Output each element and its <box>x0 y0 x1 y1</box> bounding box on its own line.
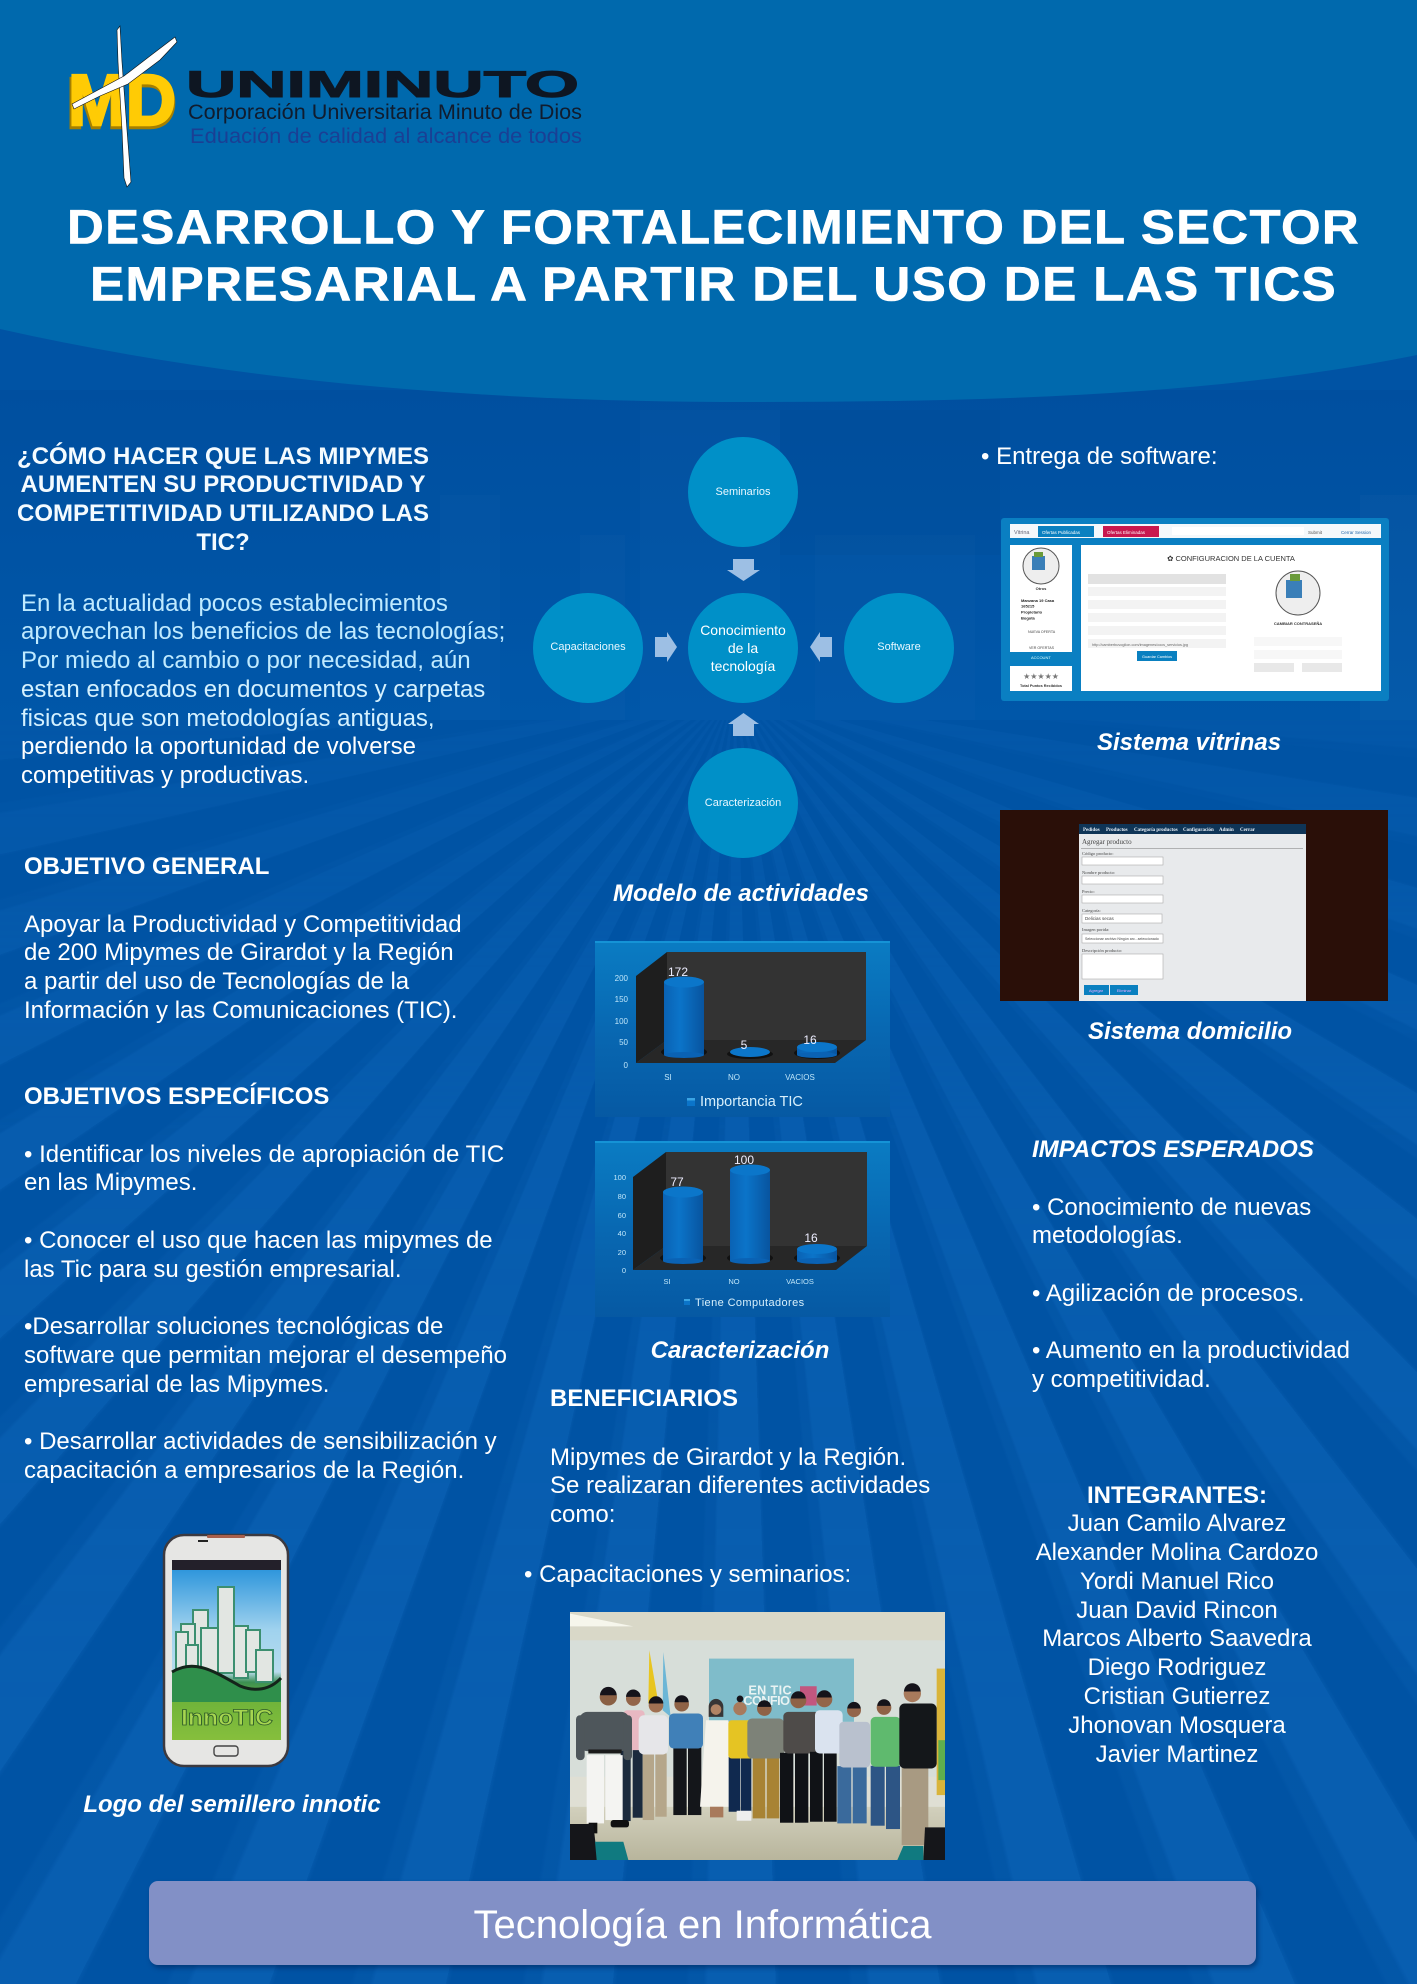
main panel: ✿ CONFIGURACION DE LA CUENTA <box>1167 554 1295 563</box>
screenshot: sistema domicilio: Código producto: <box>1082 851 1114 856</box>
screenshot: sistema domicilio: Categoría productos <box>1134 828 1178 833</box>
node: Software: Software <box>877 641 921 653</box>
node: Conocimiento de la tecnologia: tecnología <box>711 658 776 674</box>
main panel: Guardar Cambios <box>1142 655 1172 659</box>
axis labels: VACIOS <box>785 1073 815 1082</box>
screenshot: sistema domicilio: Agregar <box>1089 988 1104 993</box>
screenshot: sistema domicilio: Pedidos <box>1083 828 1100 833</box>
heading: objetivos especificos: OBJETIVOS ESPECÍFICOS <box>24 1082 329 1110</box>
main panel: CAMBIAR CONTRASEÑA <box>1274 621 1322 626</box>
text: objetivos especificos list: • Identificar los niveles de apropiación de TIC en las Mipymes. • Conocer el uso que hacen las mipymes de las Tic para su gestión empresarial. •Desarrollar soluciones tecnológicas de software que permitan mejorar el desempeño empresarial de las Mipymes. • Desarrollar actividades de sensibilización y capacitación a empresarios de la Región. <box>24 1140 507 1484</box>
screenshot: sistema domicilio: Productos <box>1106 828 1128 833</box>
nav bar: Vitrina <box>1014 530 1030 536</box>
image: group photo: EN TIC <box>748 1684 792 1698</box>
cylinder: SI 77 <box>660 1175 706 1264</box>
nav bar: Cerrar Session <box>1341 530 1372 535</box>
sidebar: ACCOUNT <box>1031 655 1051 660</box>
caption: modelo de actividades: Modelo de actividades <box>613 880 869 906</box>
axis labels: 0 <box>624 1061 629 1070</box>
axis labels <box>613 1173 814 1286</box>
caption: caracterizacion: Caracterización <box>651 1336 829 1364</box>
heading: objetivo general: OBJETIVO GENERAL <box>24 852 269 880</box>
logo: UNIMINUTO <box>66 25 582 188</box>
sidebar: NUEVA OFERTA <box>1028 630 1056 634</box>
sidebar: ★★★★★ <box>1023 672 1059 681</box>
people <box>576 1683 937 1845</box>
sidebar: Total Puntos Recibidos <box>1020 684 1062 688</box>
sidebar: Manzana 19 Casa <box>1021 598 1055 603</box>
image: phone with innotic logo <box>162 1534 290 1768</box>
footer bar: tecnologia en informatica <box>149 1881 1256 1965</box>
diagram: modelo de actividades <box>533 437 954 858</box>
node: Caracterizacion <box>688 748 798 858</box>
main panel: http://camberbuvoglion.com/imagenes/cocs_servicios.jpg <box>1092 643 1188 647</box>
screenshot: sistema domicilio: Nombre producto: <box>1082 870 1115 875</box>
cylinder: VACIOS 16: 16 <box>804 1231 818 1245</box>
arrow: left <box>810 632 832 662</box>
node: Conocimiento de la tecnologia: Conocimiento <box>700 622 786 638</box>
cylinder: SI 77: 77 <box>670 1175 684 1189</box>
axis labels: 0 <box>622 1266 626 1275</box>
screenshot: sistema domicilio: Cerrar <box>1240 828 1256 833</box>
sidebar: 165215 <box>1021 604 1035 608</box>
heading: research question: ¿CÓMO HACER QUE LAS MIPYMES AUMENTEN SU PRODUCTIVIDAD Y COMPETITIVIDAD UTILIZANDO LAS TIC? <box>17 442 429 556</box>
screenshot: sistema domicilio: Agregar producto <box>1082 838 1132 846</box>
axis labels <box>615 974 815 1082</box>
screenshot: sistema domicilio: Precio: <box>1082 889 1095 894</box>
cylinder: SI 172: 172 <box>668 965 688 979</box>
screenshot: sistema domicilio: Eliminar <box>1117 988 1132 993</box>
screenshot: sistema domicilio: Categoría: <box>1082 908 1101 913</box>
sidebar: VER OFERTAS <box>1029 646 1055 650</box>
screenshot: sistema domicilio: Imagen portda: <box>1082 927 1109 932</box>
axis labels: 20 <box>618 1248 626 1257</box>
axis labels: 40 <box>618 1229 626 1238</box>
image: group photo <box>570 1612 945 1860</box>
screenshot: sistema domicilio <box>1000 810 1388 1001</box>
background: skyline and top wave <box>0 0 1417 422</box>
chart: tiene computadores <box>595 1141 890 1317</box>
axis labels: 100 <box>615 1017 629 1026</box>
axis labels: 80 <box>618 1192 626 1201</box>
arrow: right <box>655 632 677 662</box>
axis labels: 150 <box>615 995 629 1004</box>
cylinder: SI 172 <box>661 965 707 1058</box>
legend: Importancia TIC <box>700 1094 803 1110</box>
axis labels: 60 <box>618 1211 626 1220</box>
node: Capacitaciones <box>533 593 643 703</box>
axis labels: 50 <box>619 1038 629 1047</box>
text: introduction: En la actualidad pocos establecimientos aprovechan los beneficios de las tecnologías; Por miedo al cambio o por necesidad, aún estan enfocados en documentos y carpetas fisicas que son metodologías antiguas, perdiendo la oportunidad de volverse competitivas y productivas. <box>21 590 505 789</box>
axis labels: 200 <box>615 974 629 983</box>
sidebar: Bogota <box>1021 616 1036 620</box>
nav bar: Submit <box>1308 530 1323 535</box>
node: Seminarios: Seminarios <box>715 486 771 498</box>
footer bar: tecnologia en informatica: Tecnología en Informática <box>473 1903 932 1947</box>
arrow: down <box>727 559 760 581</box>
screenshot: sistema domicilio: Delicias secas <box>1085 916 1115 921</box>
nav bar: Ofertas Eliminadas <box>1107 530 1146 535</box>
screenshot: sistema domicilio: Seleccionar archivo Ningún arc...seleccionado <box>1085 937 1159 941</box>
cylinder: VACIOS 16 <box>794 1033 840 1059</box>
node: Seminarios <box>688 437 798 547</box>
screenshot: sistema domicilio: Configuración <box>1183 828 1214 833</box>
title <box>67 202 1360 312</box>
node: Capacitaciones: Capacitaciones <box>550 641 626 653</box>
caption: sistema vitrinas: Sistema vitrinas <box>1097 728 1281 756</box>
cylinder: NO 100 <box>727 1153 773 1264</box>
title: DESARROLLO Y FORTALECIMIENTO DEL SECTOR <box>67 202 1360 254</box>
image: group photo: CONFIO <box>743 1694 790 1708</box>
city <box>176 1587 273 1682</box>
heading: beneficiarios: BENEFICIARIOS <box>550 1384 738 1412</box>
sidebar: Propietario <box>1021 610 1043 614</box>
legend: Tiene Computadores <box>695 1297 805 1309</box>
node: Caracterizacion: Caracterización <box>705 797 781 809</box>
logo wordmark <box>186 64 582 148</box>
text: entrega de software: • Entrega de software: <box>981 442 1218 470</box>
screenshot: sistema domicilio: Admin <box>1219 828 1234 833</box>
caption: logo del semillero: Logo del semillero innotic <box>83 1790 381 1818</box>
heading: impactos esperados: IMPACTOS ESPERADOS <box>1032 1136 1314 1162</box>
sidebar: Otros <box>1036 586 1047 591</box>
axis labels: NO <box>728 1073 740 1082</box>
caption: sistema domicilio: Sistema domicilio <box>1088 1018 1292 1044</box>
axis labels: SI <box>664 1073 672 1082</box>
node: Conocimiento de la tecnologia <box>688 593 798 703</box>
node: Software <box>844 593 954 703</box>
logo wordmark: Corporación Universitaria Minuto de Dios <box>188 101 582 124</box>
image: phone with innotic logo: InnoTIC <box>181 1705 273 1730</box>
text: objetivo general: Apoyar la Productividad y Competitividad de 200 Mipymes de Girardot y la Región a partir del uso de Tecnologías de la Información y las Comunicaciones (TIC). <box>24 910 462 1024</box>
node: Conocimiento de la tecnologia: de la <box>728 640 758 656</box>
axis labels: 100 <box>613 1173 626 1182</box>
title: EMPRESARIAL A PARTIR DEL USO DE LAS TICS <box>90 258 1337 312</box>
arrow: up <box>728 713 759 736</box>
text: integrantes: INTEGRANTES: Juan Camilo Alvarez Alexander Molina Cardozo Yordi Manuel Rico Juan David Rincon Marcos Alberto Saavedra Diego Rodriguez Cristian Gutierrez Jhonovan Mosquera Javier Martinez <box>1036 1482 1318 1768</box>
nav bar <box>1010 524 1381 538</box>
cylinder: NO 100: 100 <box>734 1153 754 1167</box>
cylinder: VACIOS 16: 16 <box>803 1033 817 1047</box>
logo wordmark: UNIMINUTO <box>186 64 579 105</box>
nav bar: Ofertas Publicadas <box>1042 530 1081 535</box>
axis labels: SI <box>663 1277 671 1286</box>
logo mark: yellow MD: MD <box>68 61 176 141</box>
logo mark: yellow MD: MD <box>66 64 177 144</box>
sidebar <box>1010 545 1072 691</box>
cylinder: VACIOS 16 <box>794 1231 840 1264</box>
background: rays <box>0 960 1417 1984</box>
screenshot: sistema vitrinas <box>1001 518 1389 701</box>
cylinder: NO 5: 5 <box>741 1038 748 1052</box>
main panel <box>1081 545 1381 691</box>
cylinder: NO 5 <box>727 1038 773 1059</box>
text: capacitaciones y seminarios: • Capacitaciones y seminarios: <box>524 1560 851 1588</box>
screenshot: sistema domicilio: Descripción producto: <box>1082 948 1122 953</box>
axis labels: VACIOS <box>786 1277 814 1286</box>
logo mark: white cross <box>72 26 177 187</box>
text: impactos esperados list: • Conocimiento de nuevas metodologías. • Agilización de procesos. • Aumento en la productividad y competitividad. <box>1032 1194 1350 1393</box>
text: beneficiarios: Mipymes de Girardot y la Región. Se realizaran diferentes actividades como: <box>550 1444 930 1528</box>
axis labels: NO <box>728 1277 740 1286</box>
chairs <box>570 1824 597 1860</box>
logo wordmark: Eduación de calidad al alcance de todos <box>190 125 582 148</box>
chart: importancia TIC <box>595 941 890 1117</box>
